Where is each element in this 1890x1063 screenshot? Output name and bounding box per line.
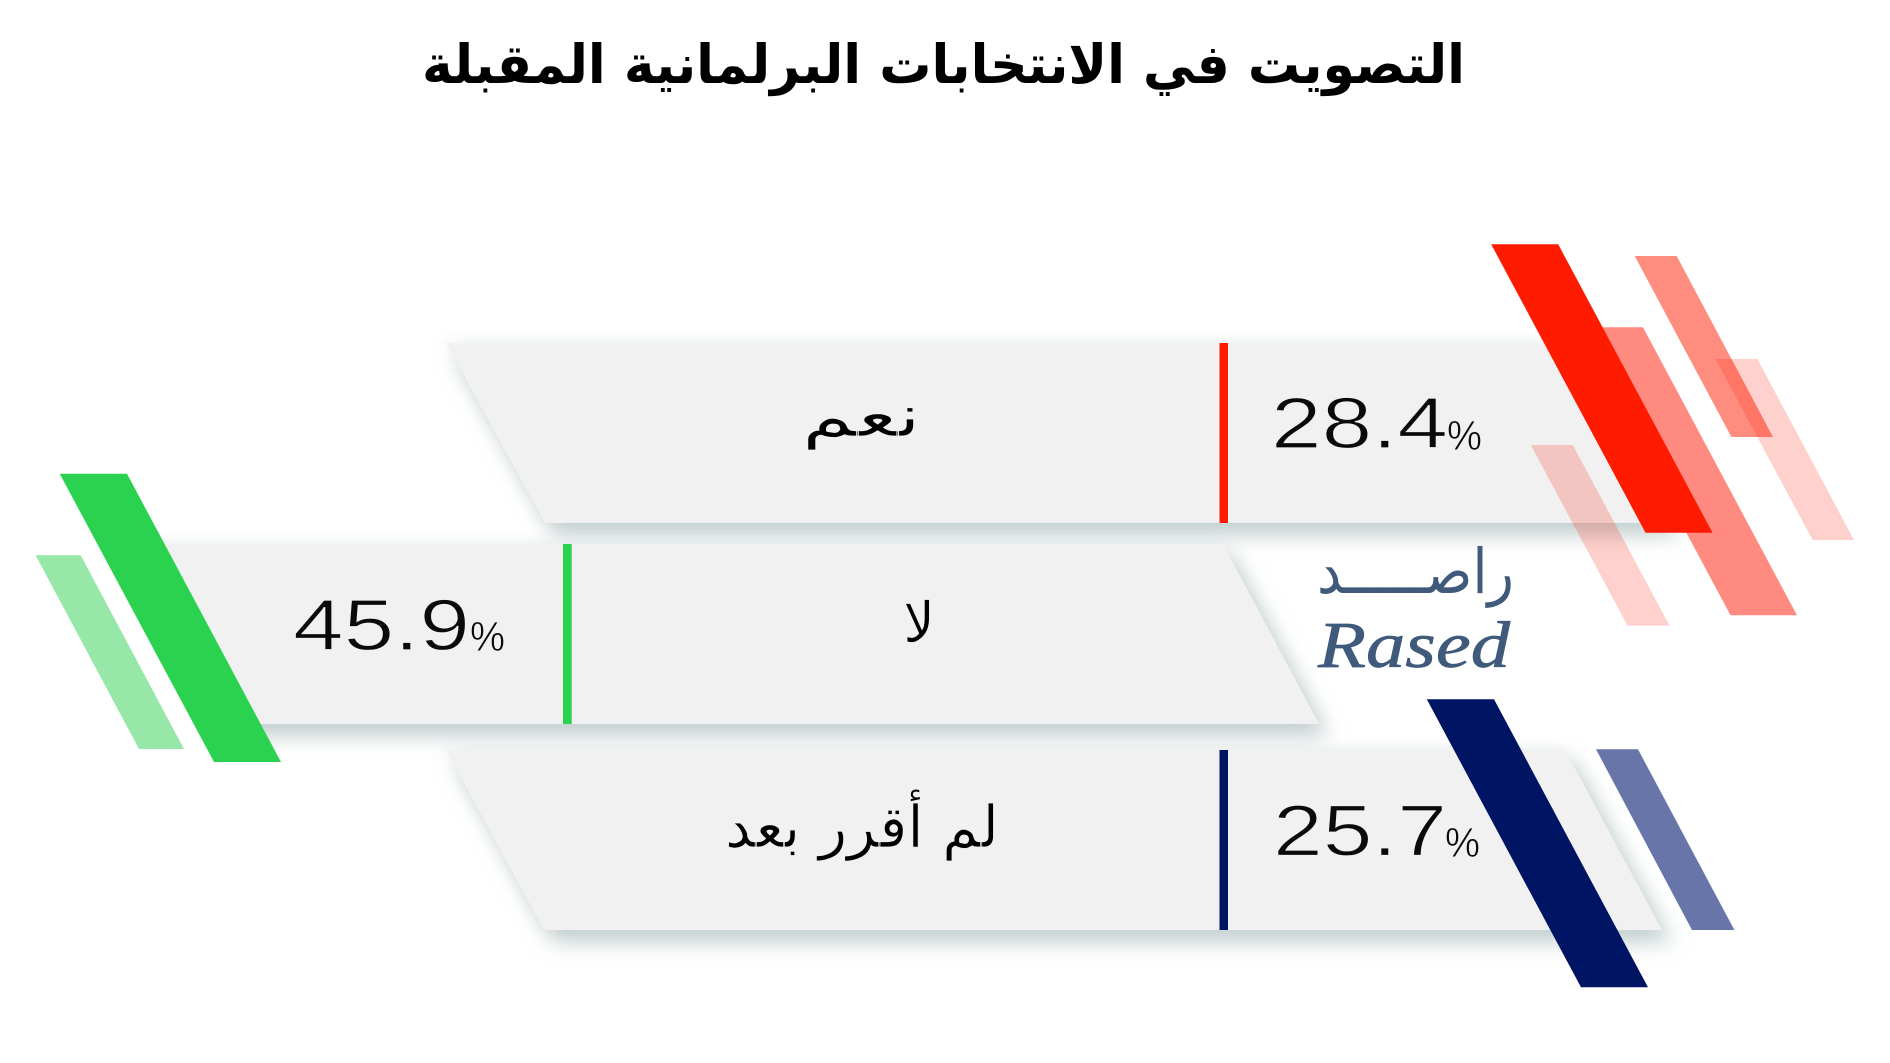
accent: green stripes (36, 474, 281, 762)
value: 25.7: 25.7 (1273, 792, 1447, 872)
bar: no background (130, 544, 1319, 724)
stripe: main red (1491, 244, 1712, 533)
percent sign: % (1447, 412, 1482, 459)
stripe: pale navy (1596, 749, 1734, 930)
percent sign: % (470, 613, 505, 660)
accent: navy stripes (1427, 699, 1734, 987)
panel: yes row (446, 343, 1670, 523)
panel: no row (130, 544, 1319, 724)
stripe: pale right (1715, 359, 1854, 540)
value: 28.4: 28.4 (1271, 384, 1448, 464)
bar: undecided background (446, 750, 1662, 930)
label: no: لا (903, 591, 935, 656)
stripe: main navy (1427, 699, 1648, 987)
divider: no green line (563, 544, 572, 724)
divider: yes red line (1220, 343, 1228, 523)
bar: yes background (446, 343, 1670, 523)
title: التصويت في الانتخابات البرلمانية المقبلة (422, 33, 1465, 96)
logo latin wordmark: Rased (1317, 609, 1511, 682)
stripe: medium upper (1635, 256, 1773, 437)
logo: Rased (1317, 535, 1514, 682)
panel: undecided row (446, 750, 1662, 930)
percent sign: % (1445, 819, 1480, 866)
stripe: medium long (1576, 327, 1797, 615)
stripe: pale green (36, 555, 184, 749)
stripe: pale lower (1531, 445, 1670, 626)
value: 45.9: 45.9 (293, 586, 470, 666)
label: undecided: لم أقرر بعد (725, 789, 999, 862)
divider: undecided navy line (1220, 750, 1228, 930)
logo arabic wordmark: راصـــــد (1317, 535, 1514, 608)
accent: red stripes (1491, 244, 1854, 626)
stripe: main green (60, 474, 281, 762)
label: yes: نعم (802, 382, 921, 450)
